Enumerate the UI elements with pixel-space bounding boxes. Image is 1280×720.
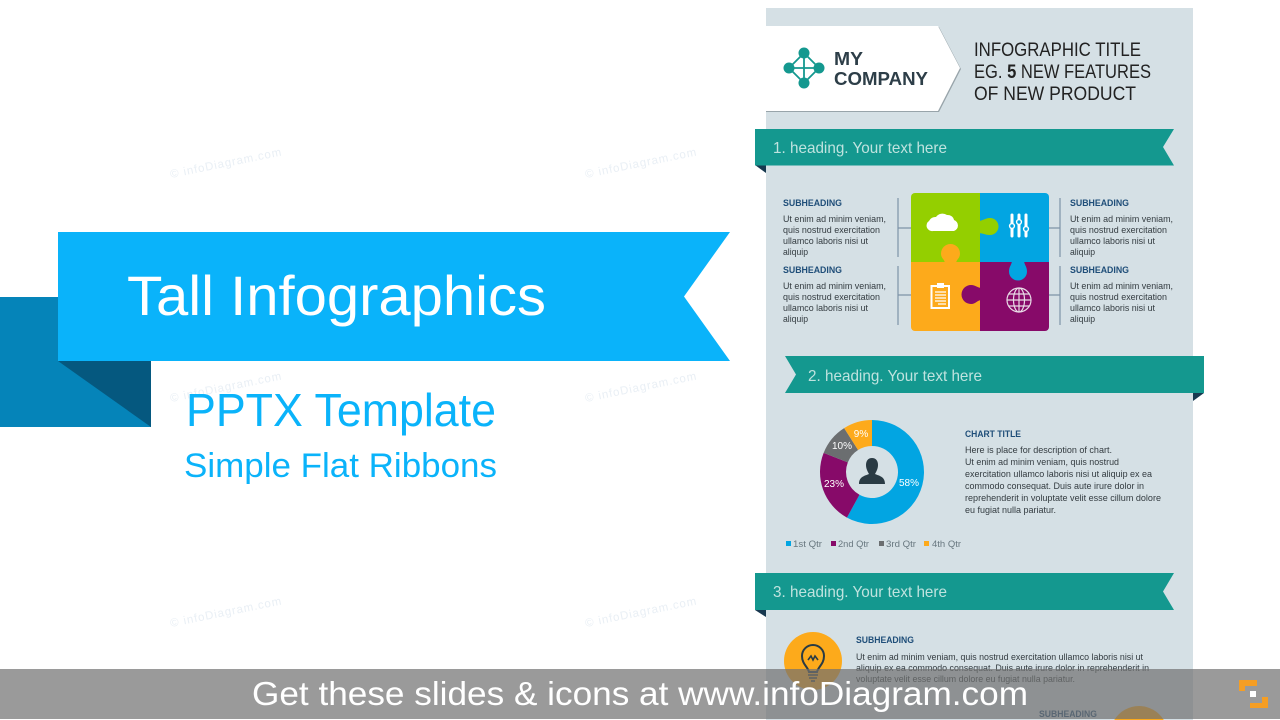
text: top left: aliquip — [783, 247, 808, 258]
chart description: commodo consequat. Duis aute irure dolor in — [965, 481, 1144, 492]
percentage labels: 23% — [824, 479, 844, 490]
text: section 3 item 1: voluptate velit esse cillum dolore eu fugiat nulla pariatur. — [856, 674, 1075, 685]
text: top left: Ut enim ad minim veniam, — [783, 214, 886, 225]
chart legend — [786, 539, 961, 550]
text: bottom left: aliquip — [783, 314, 808, 325]
subtitle: Simple Flat Ribbons — [184, 447, 497, 485]
company name: COMPANY — [834, 69, 928, 89]
ribbon: heading 2 — [785, 356, 1204, 401]
donut chart — [820, 420, 924, 524]
puzzle tabs — [941, 218, 1027, 304]
text: top right: SUBHEADING — [1070, 198, 1129, 209]
infographic title: INFOGRAPHIC TITLE — [974, 40, 1141, 61]
icon: cloud — [927, 214, 958, 231]
percentage labels: 58% — [899, 478, 919, 489]
chart description — [965, 429, 1161, 516]
text: top right: ullamco laboris nisi ut — [1070, 236, 1155, 247]
text: section 3 item 1 — [856, 635, 1149, 685]
icon: clipboard — [932, 283, 949, 308]
text: bottom right — [1070, 265, 1173, 325]
icon: person — [859, 458, 885, 484]
text: top right: aliquip — [1070, 247, 1095, 258]
chart legend: 3rd Qtr — [886, 539, 916, 550]
footer bar — [0, 669, 1280, 719]
infographic title — [974, 40, 1151, 105]
text: bottom right: quis nostrud exercitation — [1070, 292, 1167, 303]
icon: circle item 2 — [1114, 706, 1164, 720]
footer text: Get these slides & icons at www.infoDiagram.com — [252, 675, 1028, 712]
text: bottom right: Ut enim ad minim veniam, — [1070, 281, 1173, 292]
watermarks — [169, 147, 697, 630]
text: top left — [783, 198, 886, 258]
logo arrow — [766, 26, 961, 112]
text: section 3 item 1: SUBHEADING — [856, 635, 914, 646]
icon: company logo — [784, 48, 824, 88]
ribbon: heading 3 — [755, 573, 1174, 617]
text: bottom right: ullamco laboris nisi ut — [1070, 303, 1155, 314]
text: top right: quis nostrud exercitation — [1070, 225, 1167, 236]
main title ribbon — [0, 232, 730, 427]
text: bottom left: quis nostrud exercitation — [783, 292, 880, 303]
chart description: Here is place for description of chart. — [965, 445, 1112, 456]
puzzle graphic — [911, 193, 1049, 331]
ribbon: heading 1: 1. heading. Your text here — [773, 140, 947, 157]
icon: globe — [1007, 288, 1031, 312]
subtitle — [184, 384, 497, 485]
chart description: CHART TITLE — [965, 429, 1021, 440]
ribbon: heading 2: 2. heading. Your text here — [808, 368, 982, 385]
watermarks: © infoDiagram.com — [169, 371, 282, 405]
text: section 3 item 1: Ut enim ad minim veniam, quis nostrud exercitation ullamco laboris nisi ut — [856, 652, 1143, 663]
text: bottom left — [783, 265, 886, 325]
company name: MY — [834, 49, 863, 69]
title: Tall Infographics — [127, 264, 546, 327]
icon: footer logo — [1239, 680, 1268, 708]
icon: sliders — [1010, 215, 1028, 236]
watermarks: © infoDiagram.com — [584, 371, 697, 405]
infographic title: OF NEW PRODUCT — [974, 84, 1136, 105]
infographic title: EG. 5 NEW FEATURES — [974, 62, 1151, 83]
chart description: eu fugiat nulla pariatur. — [965, 505, 1056, 516]
section 1: puzzle and texts — [783, 193, 1173, 331]
chart description: Ut enim ad minim veniam, quis nostrud — [965, 457, 1119, 468]
text: bottom right: SUBHEADING — [1070, 265, 1129, 276]
connector lines — [898, 198, 1060, 325]
watermarks: © infoDiagram.com — [584, 147, 697, 181]
panel: tall infographic — [755, 8, 1204, 720]
text: top left: ullamco laboris nisi ut — [783, 236, 868, 247]
subtitle: PPTX Template — [186, 384, 496, 436]
watermarks: © infoDiagram.com — [169, 147, 282, 181]
company name — [834, 49, 928, 89]
text: top left: quis nostrud exercitation — [783, 225, 880, 236]
text: section 3 item 1: aliquip ex ea commodo consequat. Duis aute irure dolor in reprehenderit in — [856, 663, 1149, 674]
text: top right: Ut enim ad minim veniam, — [1070, 214, 1173, 225]
chart legend: 4th Qtr — [932, 539, 961, 550]
text: section 3 item 2: SUBHEADING — [1039, 709, 1097, 719]
icon: light bulb — [784, 632, 842, 690]
ribbon: heading 3: 3. heading. Your text here — [773, 584, 947, 601]
percentage labels: 10% — [832, 441, 852, 452]
watermarks: © infoDiagram.com — [584, 596, 697, 630]
chart legend: 1st Qtr — [793, 539, 822, 550]
chart description: exercitation ullamco laboris nisi ut aliquip ex ea — [965, 469, 1153, 480]
percentage labels — [824, 429, 919, 490]
chart description: reprehenderit in voluptate velit esse cillum dolore — [965, 493, 1161, 504]
text: bottom left: SUBHEADING — [783, 265, 842, 276]
text: top left: SUBHEADING — [783, 198, 842, 209]
text: bottom left: ullamco laboris nisi ut — [783, 303, 868, 314]
percentage labels: 9% — [854, 429, 868, 440]
ribbon: heading 1 — [755, 129, 1174, 173]
text: bottom left: Ut enim ad minim veniam, — [783, 281, 886, 292]
text: bottom right: aliquip — [1070, 314, 1095, 325]
chart legend: 2nd Qtr — [838, 539, 869, 550]
text: top right — [1070, 198, 1173, 258]
watermarks: © infoDiagram.com — [169, 596, 282, 630]
